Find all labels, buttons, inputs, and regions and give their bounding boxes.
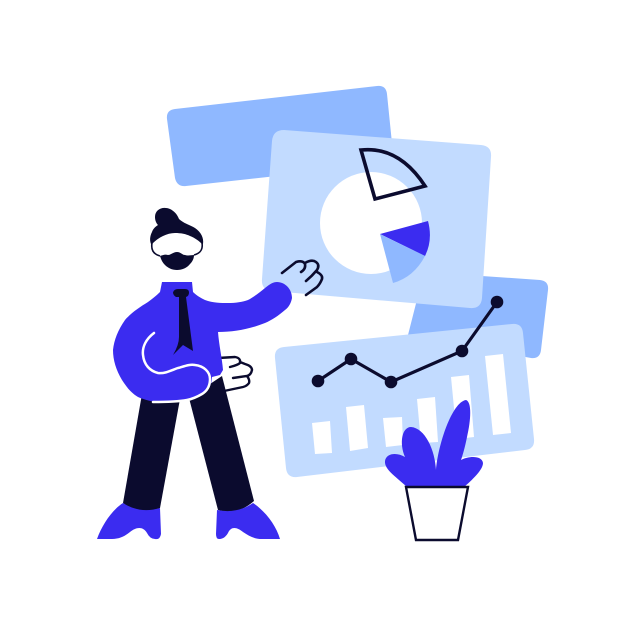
white arm outline xyxy=(143,333,210,402)
panel: back right card xyxy=(408,272,548,358)
person xyxy=(97,208,322,539)
plant leaves xyxy=(385,400,483,488)
right leg xyxy=(189,376,254,512)
right shoe xyxy=(216,503,280,539)
panel: back top card xyxy=(167,86,394,186)
beard xyxy=(160,252,194,270)
plant pot xyxy=(406,487,468,540)
torso and arm xyxy=(113,282,292,402)
head xyxy=(150,208,203,270)
pie: dark blue slice xyxy=(380,221,430,256)
face xyxy=(152,233,202,258)
panel: bar and line chart card xyxy=(275,296,534,477)
pointing hand xyxy=(282,261,322,295)
necktie xyxy=(173,289,193,355)
pie: light blue slice xyxy=(380,234,425,283)
icon: potted plant xyxy=(385,400,483,540)
left shoe xyxy=(97,503,161,539)
lower hand xyxy=(218,357,252,391)
pie: outlined slice xyxy=(361,150,425,199)
panel: pie chart card xyxy=(262,130,491,308)
bun and hair xyxy=(150,208,203,246)
bar chart xyxy=(312,354,511,454)
left leg xyxy=(123,394,180,511)
line chart xyxy=(312,296,503,388)
pie: white circle xyxy=(320,172,422,274)
face side outline xyxy=(152,243,202,256)
